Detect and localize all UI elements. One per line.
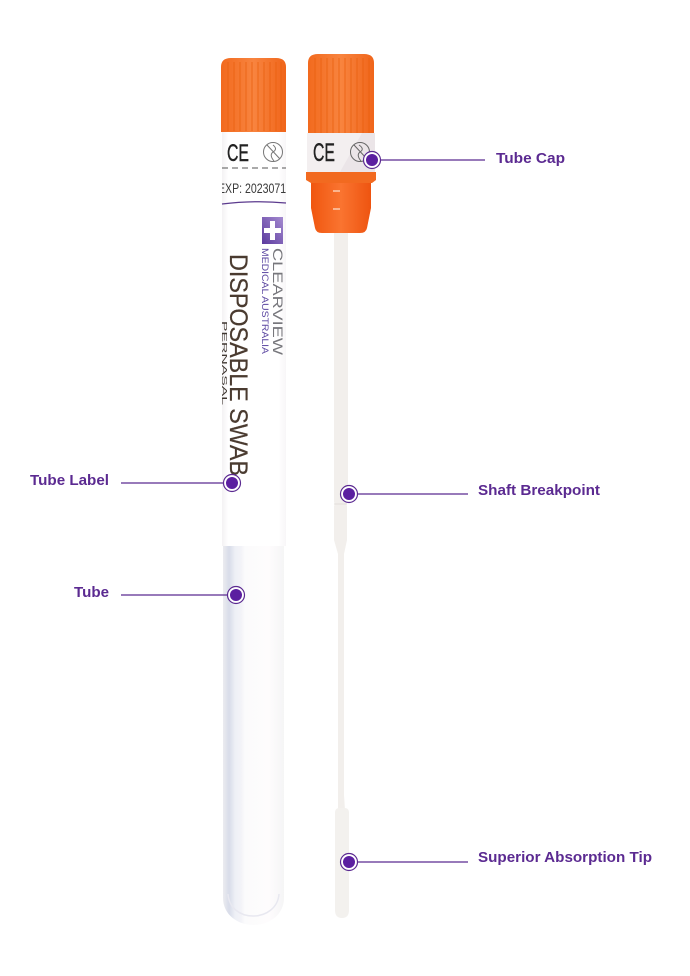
shaft upper: [334, 232, 348, 810]
cap lower body: [311, 180, 371, 233]
absorption tip: [335, 808, 349, 918]
cap label band: [307, 133, 375, 172]
tube: capped tube with label: [221, 58, 286, 923]
callout: Shaft Breakpoint: Shaft Breakpoint: [478, 483, 600, 499]
icon: do not reuse symbol: [264, 142, 282, 162]
expiry text: EXP: 20230714: [218, 181, 292, 196]
callout: Superior Absorption Tip: Superior Absorption Tip: [478, 850, 652, 866]
icon: do not reuse symbol: [350, 142, 370, 162]
CE mark: CE: [227, 140, 249, 167]
callout: Tube: Tube: [74, 585, 109, 601]
callout: Tube: [74, 585, 244, 604]
cap top: [308, 54, 374, 135]
callout: Tube Label: Tube Label: [30, 473, 109, 489]
product name: DISPOSABLE SWAB: [224, 254, 252, 476]
product type: PERNASAL: [220, 321, 229, 405]
cap ridges highlights: [333, 191, 340, 209]
callout: Tube Cap: Tube Cap: [496, 151, 565, 167]
tube glass body: [223, 540, 284, 925]
perforated dashed line: [222, 167, 286, 169]
tube label background: [222, 130, 286, 546]
logo cross: [262, 217, 283, 244]
cap collar: [306, 172, 376, 183]
brand sub MEDICAL AUSTRALIA: MEDICAL AUSTRALIA: [259, 248, 270, 355]
shaft breakpoint notch: [334, 503, 347, 505]
tube inner highlight: [228, 894, 279, 916]
callout: Tube Label: [30, 473, 240, 492]
callout: Shaft Breakpoint: [340, 483, 600, 502]
CE mark: CE: [313, 139, 335, 167]
swab: cap and shaft: [306, 54, 376, 918]
purple divider: [222, 202, 286, 204]
callout: Tube Cap: [364, 151, 565, 168]
tube cap orange: [221, 58, 286, 132]
brand name CLEARVIEW: CLEARVIEW: [270, 248, 286, 356]
callout: Superior Absorption Tip: [340, 850, 652, 870]
